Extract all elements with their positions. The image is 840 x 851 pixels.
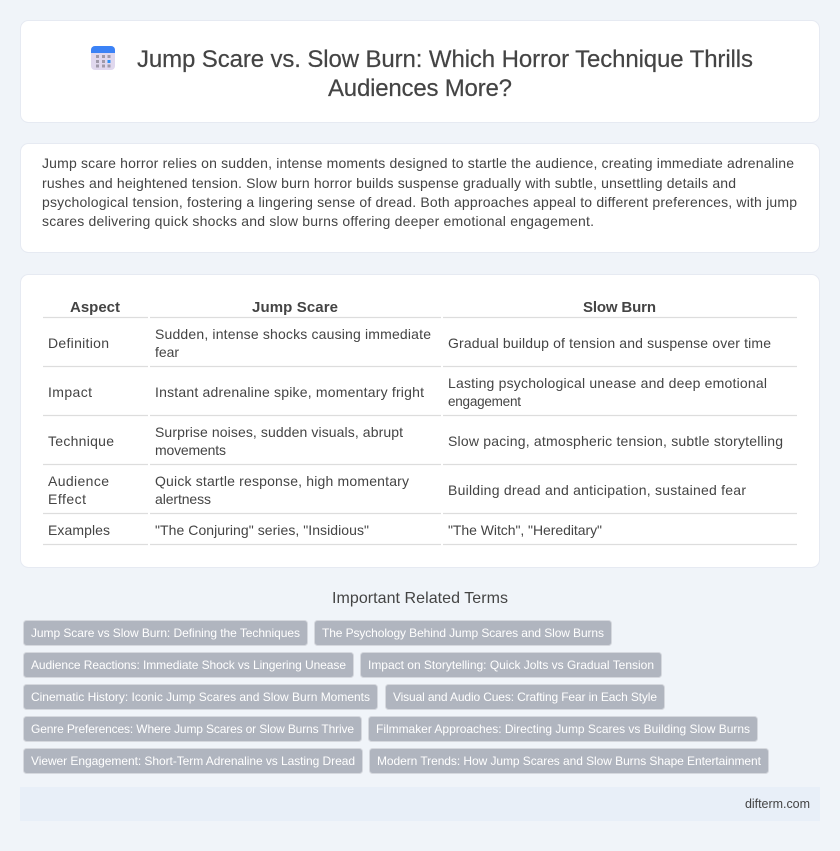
- table row: impact: [48, 375, 767, 409]
- table row: technique: Technique: [48, 433, 114, 449]
- table row: technique: movements: [155, 442, 226, 458]
- chip: [386, 684, 664, 710]
- table row: audience effect: [48, 473, 746, 507]
- panel: comparison table: [20, 274, 820, 568]
- related terms chips: [24, 620, 768, 774]
- text block: description: [42, 155, 797, 229]
- chip: Filmmaker Approaches: Directing Jump Scares vs Building Slow Burns: [376, 722, 750, 736]
- text block: description: Jump scare horror relies on sudden, intense moments designed to startle the audience, creating immediate adrenaline: [42, 155, 794, 171]
- table header row: Jump Scare: [252, 299, 338, 316]
- panel: description: [20, 144, 820, 252]
- chip: [314, 620, 612, 646]
- table row: examples: "The Conjuring" series, "Insidious": [155, 522, 369, 538]
- table header row: Aspect: [70, 299, 120, 316]
- chip: Modern Trends: How Jump Scares and Slow Burns Shape Entertainment: [377, 754, 762, 768]
- chip: Audience Reactions: Immediate Shock vs Lingering Unease: [31, 658, 346, 672]
- panel: title header: [20, 20, 820, 122]
- table row: definition: fear: [155, 344, 179, 360]
- chip: Impact on Storytelling: Quick Jolts vs Gradual Tension: [368, 658, 654, 672]
- table row: technique: Slow pacing, atmospheric tension, subtle storytelling: [448, 433, 783, 449]
- table row: definition: Gradual buildup of tension and suspense over time: [448, 335, 771, 351]
- table row: impact: Impact: [48, 384, 92, 400]
- table row: impact: Instant adrenaline spike, momentary fright: [155, 384, 424, 400]
- title: [137, 46, 753, 102]
- chip: Cinematic History: Iconic Jump Scares and Slow Burn Moments: [31, 690, 370, 704]
- chip: [24, 620, 308, 646]
- chip: The Psychology Behind Jump Scares and Slow Burns: [322, 626, 604, 640]
- table row: audience effect: Building dread and anticipation, sustained fear: [448, 482, 746, 498]
- title: Audiences More?: [328, 75, 512, 102]
- chip: [370, 748, 768, 774]
- icon: calendar: [91, 46, 115, 70]
- table row: audience effect: Effect: [48, 491, 86, 507]
- footer: [20, 787, 820, 821]
- chip: [24, 684, 378, 710]
- table row: technique: [48, 424, 783, 458]
- table row: impact: engagement: [448, 394, 521, 409]
- chip: Genre Preferences: Where Jump Scares or Slow Burns Thrive: [31, 722, 354, 736]
- title: Jump Scare vs. Slow Burn: Which Horror Technique Thrills: [137, 46, 753, 73]
- chip: Viewer Engagement: Short-Term Adrenaline vs Lasting Dread: [31, 754, 355, 768]
- table row: audience effect: alertness: [155, 491, 211, 507]
- table row: impact: Lasting psychological unease and deep emotional: [448, 375, 767, 391]
- chip: [24, 716, 362, 742]
- chip: [360, 652, 662, 678]
- heading: important related terms: Important Related Terms: [332, 590, 508, 607]
- table row: examples: "The Witch", "Hereditary": [448, 522, 602, 538]
- chip: [24, 748, 362, 774]
- table row: definition: Definition: [48, 335, 109, 351]
- table row: audience effect: Quick startle response, high momentary: [155, 473, 409, 489]
- chip: [368, 716, 758, 742]
- table row: technique: Surprise noises, sudden visuals, abrupt: [155, 424, 403, 440]
- table row: definition: Sudden, intense shocks causing immediate: [155, 326, 431, 342]
- table row: definition: [48, 326, 771, 360]
- chip: [24, 652, 354, 678]
- text block: description: psychological tension, fostering a lingering sense of dread. Both approaches appeal to different preferences, with jump: [42, 194, 797, 210]
- table header row: [70, 299, 656, 316]
- text block: description: rushes and heightened tension. Slow burn horror builds suspense gradually with subtle, unsettling details and: [42, 175, 736, 191]
- table row: examples: Examples: [48, 522, 110, 538]
- table row: examples: [48, 522, 602, 538]
- text block: description: scares delivering quick shocks and slow burns offering deeper emotional engagement.: [42, 213, 594, 229]
- table header row: Slow Burn: [583, 299, 656, 316]
- table row: audience effect: Audience: [48, 473, 109, 489]
- chip: Visual and Audio Cues: Crafting Fear in Each Style: [393, 690, 657, 704]
- footer: difterm.com: [745, 797, 810, 811]
- chip: Jump Scare vs Slow Burn: Defining the Techniques: [31, 626, 300, 640]
